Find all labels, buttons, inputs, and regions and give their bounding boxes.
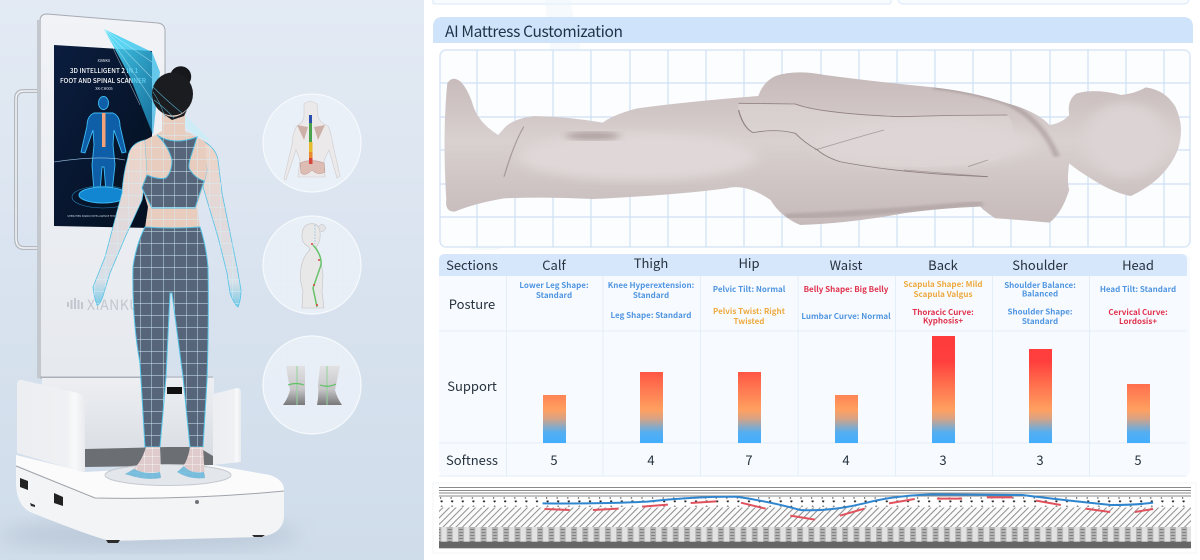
screen: 3D INTELLIGENT 2 IN 1 xyxy=(70,66,138,75)
table header row: Shoulder xyxy=(1012,255,1069,274)
screen: XIANKU xyxy=(98,59,111,64)
base slot xyxy=(167,387,182,394)
bar chart: support xyxy=(543,336,1150,443)
base top plate xyxy=(16,455,284,498)
left wing xyxy=(17,380,85,472)
table header row xyxy=(439,253,1187,276)
base ports xyxy=(20,478,28,490)
posture descriptions: Lower Leg Shape: xyxy=(519,280,589,291)
posture descriptions: Shoulder Shape: xyxy=(1007,306,1073,318)
base feet xyxy=(30,503,265,543)
base button xyxy=(195,500,199,504)
row labels xyxy=(446,294,498,469)
screen xyxy=(54,45,152,228)
posture descriptions: Scapula Valgus xyxy=(914,289,972,300)
tower edge xyxy=(37,20,41,378)
side handle xyxy=(16,91,39,248)
table header row: Back xyxy=(928,255,959,274)
3D scanned body xyxy=(445,72,1181,225)
softness values xyxy=(550,450,1142,469)
icon: body scanner kiosk xyxy=(0,14,300,551)
posture descriptions: Belly Shape: Big Belly xyxy=(804,284,889,295)
base lower body xyxy=(16,465,284,541)
softness values: 4 xyxy=(842,450,850,469)
back wall xyxy=(42,378,214,458)
figure: woman with body scan mesh xyxy=(93,66,241,479)
circle: ankle scan xyxy=(263,336,361,434)
kiosk tower xyxy=(40,14,165,378)
scan beam xyxy=(104,29,212,142)
table header row: Head xyxy=(1122,255,1154,274)
posture descriptions: Head Tilt: Standard xyxy=(1100,284,1176,295)
table header row: Waist xyxy=(830,255,862,274)
posture descriptions: Pelvis Twist: Right xyxy=(713,306,786,317)
red support markers xyxy=(545,497,1153,520)
leggings xyxy=(133,227,208,447)
posture descriptions: Kyphosis+ xyxy=(923,316,963,326)
screen: FOOT AND SPINAL SCANNER xyxy=(60,76,147,85)
hologram figure xyxy=(81,96,126,192)
spine contour line xyxy=(543,494,1153,520)
circle: spine posture scan xyxy=(263,94,361,192)
softness values: 4 xyxy=(647,450,655,469)
row labels: Posture xyxy=(449,294,495,313)
row labels: Support xyxy=(447,376,497,395)
posture descriptions xyxy=(519,279,1176,327)
screen: XK-CH005 xyxy=(95,87,113,92)
softness values: 3 xyxy=(939,450,947,469)
softness values: 5 xyxy=(550,450,558,469)
posture descriptions: Standard xyxy=(1022,316,1058,327)
faint background streaks xyxy=(445,0,590,250)
row labels: Softness xyxy=(446,450,498,469)
sports top xyxy=(142,135,204,208)
posture descriptions: Balanced xyxy=(1022,288,1058,300)
table: mattress sections xyxy=(439,253,1190,476)
posture descriptions: Cervical Curve: xyxy=(1108,307,1168,318)
posture descriptions: Leg Shape: Standard xyxy=(611,310,691,321)
posture descriptions: Knee Hyperextension: xyxy=(608,280,695,291)
posture descriptions: Lumbar Curve: Normal xyxy=(801,311,891,322)
dark floor xyxy=(85,447,213,467)
turntable xyxy=(105,464,231,486)
table header row: Thigh xyxy=(634,253,668,272)
heading: AI Mattress Customization xyxy=(445,20,623,42)
posture descriptions: Scapula Shape: Mild xyxy=(903,279,983,290)
right wing xyxy=(213,388,241,465)
hologram spine xyxy=(102,113,106,147)
torso skin xyxy=(142,112,207,228)
left product background xyxy=(0,0,424,560)
posture descriptions: Standard xyxy=(633,290,669,301)
arms xyxy=(93,140,241,307)
table header row: Sections xyxy=(446,255,498,274)
screen: SHENZHEN XIANKU INTELLIGENCE TECHNOLOGY xyxy=(67,214,127,218)
posture descriptions: Standard xyxy=(536,290,572,301)
circle: side profile scan xyxy=(263,216,361,314)
panel: 3D body scan xyxy=(440,50,1190,247)
softness values: 3 xyxy=(1036,450,1044,469)
table header row: Calf xyxy=(542,255,567,274)
floor shadow xyxy=(0,519,300,551)
softness values: 7 xyxy=(745,450,753,469)
softness values: 5 xyxy=(1134,450,1142,469)
top cropped panels xyxy=(433,0,1189,4)
posture descriptions: Pelvic Tilt: Normal xyxy=(713,284,786,295)
table header row: Hip xyxy=(738,253,760,272)
posture descriptions: Lordosis+ xyxy=(1119,316,1157,327)
hair xyxy=(152,66,193,120)
posture descriptions: Thoracic Curve: xyxy=(912,307,974,318)
mattress cross-section xyxy=(433,483,1196,553)
hologram platform xyxy=(79,187,127,203)
watermark logo: XIANKU xyxy=(87,295,140,315)
heading xyxy=(433,17,1193,43)
feet xyxy=(125,447,205,479)
base seam xyxy=(16,466,284,498)
posture descriptions: Shoulder Balance: xyxy=(1004,280,1076,291)
posture descriptions: Twisted xyxy=(734,316,764,327)
